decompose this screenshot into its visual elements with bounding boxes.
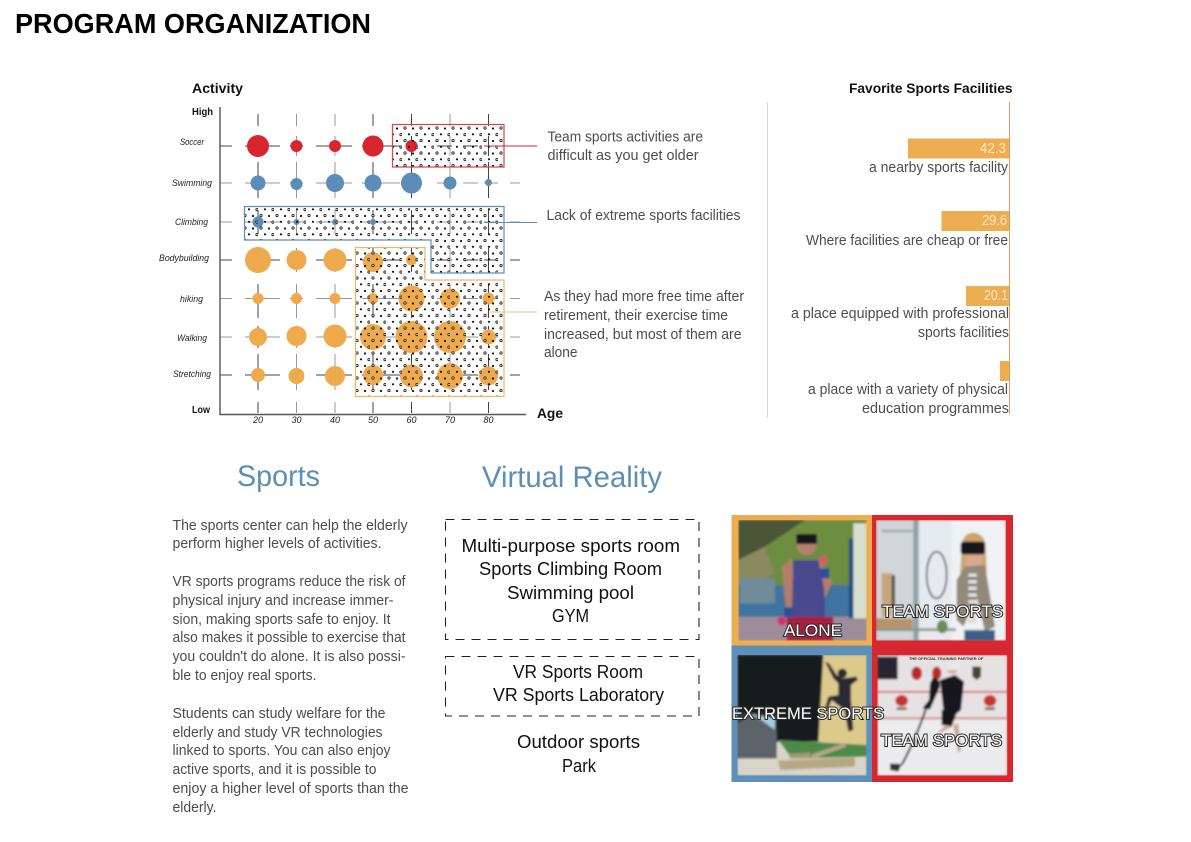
age tick labels: 20 [252, 415, 263, 425]
age tick labels: 80 [483, 415, 494, 425]
photo collage [732, 515, 1013, 782]
age axis title: Age [537, 405, 563, 421]
bar: variety of programmes [808, 361, 1009, 417]
photo caption: training partner: THE OFFICIAL TRAINING PARTNER OF [909, 657, 983, 661]
text block: sports description: sion, making sports safe to enjoy. It [172, 612, 390, 628]
bubbles: swimming and climbing [250, 172, 492, 228]
callout: retirement: As they had more free time after [544, 289, 744, 305]
chart: favorite sports facilities [768, 80, 1013, 418]
text block: sports description: perform higher levels of activities. [172, 536, 382, 552]
highlight: active and alone seniors [356, 248, 504, 396]
highlight: missing extreme sports [244, 206, 504, 273]
bar: nearby facility: a nearby sports facility [869, 160, 1009, 176]
activity row labels: hiking [180, 294, 203, 304]
axis extremes: High [192, 107, 213, 118]
activity row labels: Soccer [180, 137, 205, 147]
bar: variety of programmes: education programmes [862, 401, 1009, 417]
activity row labels: Bodybuilding [159, 253, 209, 263]
bar: professional facilities: sports facilities [918, 325, 1009, 341]
age tick labels: 40 [330, 415, 340, 425]
leader line: red [484, 145, 537, 147]
activity row labels [159, 137, 212, 379]
bar: professional facilities [791, 286, 1009, 341]
text block: sports description [172, 518, 408, 816]
panel: vr rooms: VR Sports Room [513, 662, 643, 682]
photo label: alone: ALONE [784, 621, 842, 640]
callout: retirement: alone [544, 345, 578, 361]
baseline axis [1008, 102, 1010, 414]
age tick labels: 50 [368, 415, 378, 425]
bubbles: soccer [247, 135, 418, 157]
age tick labels: 70 [445, 415, 455, 425]
photo: woman exercising alone [738, 520, 867, 641]
panel: sports rooms [446, 520, 699, 640]
callout: team sports [548, 130, 703, 164]
callout: extreme sports: Lack of extreme sports facilities [546, 208, 740, 224]
callout: retirement: increased, but most of them are [544, 327, 742, 343]
text block: sports description: VR sports programs reduce the risk of [172, 574, 406, 590]
age tick labels: 60 [406, 415, 417, 425]
text block: sports description: Students can study welfare for the [172, 706, 386, 722]
bar: cheap or free: Where facilities are cheap or free [806, 233, 1008, 249]
panel: vr rooms: VR Sports Laboratory [493, 685, 664, 705]
panel: sports rooms: Multi-purpose sports room [462, 536, 680, 556]
panel: sports rooms: Sports Climbing Room [479, 559, 662, 579]
callout: retirement: retirement, their exercise time [544, 308, 728, 324]
panel: sports rooms: Swimming pool [507, 583, 634, 603]
activity row labels: Swimming [172, 178, 212, 188]
text block: outdoor [517, 732, 640, 776]
bar: cheap or free [806, 211, 1009, 249]
text block: sports description: elderly. [172, 800, 216, 816]
photo illustrations [737, 520, 1007, 776]
highlight: team sports decline [392, 124, 504, 167]
title: PROGRAM ORGANIZATION [15, 8, 371, 39]
text block: sports description: you couldn't do alone. It is also possi- [172, 649, 406, 665]
text block: sports description: linked to sports. You can also enjoy [172, 743, 391, 759]
bar: nearby facility: 42.3 [980, 141, 1006, 157]
photo frames [732, 515, 1013, 782]
bar: cheap or free: 29.6 [982, 213, 1007, 229]
photo: hockey player [877, 655, 1007, 776]
bar: professional facilities: 20.1 [984, 288, 1008, 304]
text block: outdoor: Park [562, 756, 597, 776]
text block: sports description: ble to enjoy real sports. [172, 668, 316, 684]
heading: sports: Sports [237, 460, 320, 493]
text block: sports description: elderly and study VR technologies [172, 725, 382, 741]
text block: sports description: also makes it possible to exercise that [172, 630, 406, 646]
heading: activity axis title: Activity [192, 80, 243, 96]
bubbles: bodybuilding, hiking, walking, stretching [245, 247, 498, 389]
age tick labels [252, 415, 494, 425]
bar: professional facilities: a place equipped with professional [791, 306, 1009, 322]
photo label: team sports: TEAM SPORTS [882, 602, 1003, 621]
left divider [766, 102, 768, 418]
photo label: extreme sports: EXTREME SPORTS [732, 704, 884, 723]
leader line: blue [484, 222, 537, 224]
text block: sports description: The sports center can help the elderly [172, 518, 408, 534]
text block: outdoor: Outdoor sports [517, 732, 640, 752]
activity row labels: Walking [177, 333, 207, 343]
activity row labels: Stretching [173, 369, 211, 379]
bar: variety of programmes: a place with a variety of physical [808, 382, 1008, 398]
chart: activity by age bubble matrix [159, 80, 563, 425]
age tick labels: 30 [291, 415, 302, 425]
dashed grid [220, 114, 520, 413]
photo: woman in living room [876, 520, 1006, 641]
photo: indoor climber [737, 655, 867, 776]
callout: team sports: Team sports activities are [548, 130, 703, 146]
axes [220, 107, 526, 414]
callout: team sports: difficult as you get older [548, 148, 699, 164]
axis extremes [192, 107, 213, 416]
photo label: team sports hockey: TEAM SPORTS [881, 731, 1002, 750]
axis extremes: Low [192, 405, 210, 416]
chart heading: Favorite Sports Facilities [849, 80, 1013, 96]
bar: nearby facility [869, 138, 1009, 176]
panel: vr rooms [446, 656, 699, 716]
heading: virtual reality: Virtual Reality [482, 461, 662, 494]
text block: sports description: active sports, and it is possible to [172, 762, 376, 778]
text block: sports description: physical injury and increase immer- [172, 593, 394, 609]
text block: sports description: enjoy a higher level of sports than the [172, 781, 408, 797]
panel: sports rooms: GYM [552, 606, 589, 626]
leader line: orange [490, 311, 537, 313]
callout: retirement [544, 289, 744, 361]
activity row labels: Climbing [175, 217, 208, 227]
